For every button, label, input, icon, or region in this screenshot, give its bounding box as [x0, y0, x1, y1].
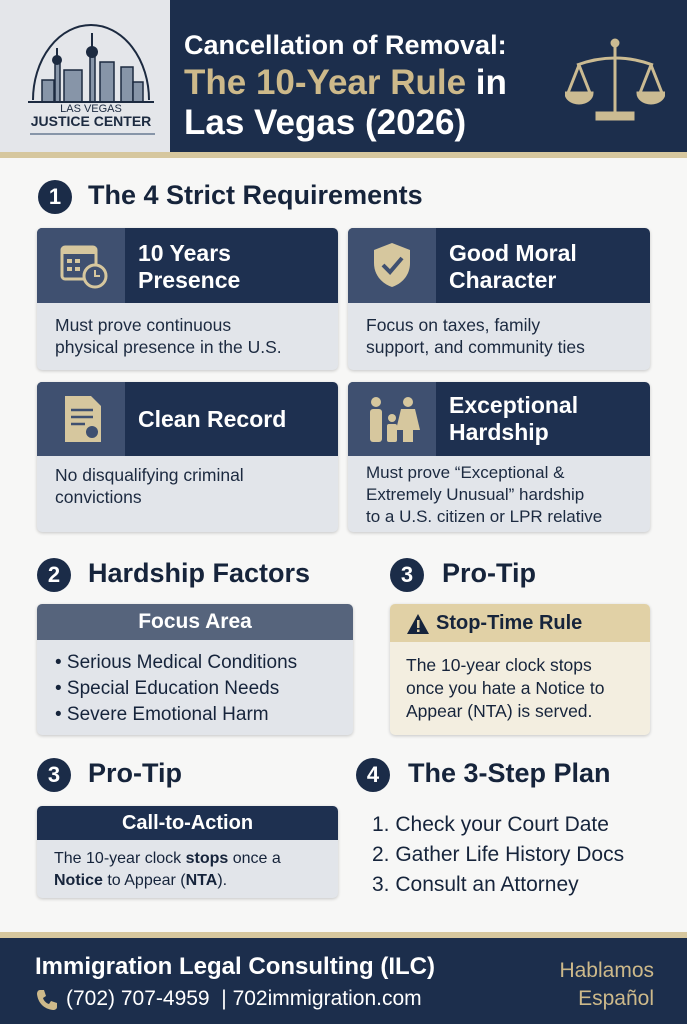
- section 1 heading: 1: [49, 184, 61, 209]
- panel: stop-time rule: Stop-Time Rule: [436, 612, 582, 634]
- panel: call-to-action: The 10-year clock stops once a: [54, 850, 281, 867]
- logo panel: [0, 0, 170, 152]
- bullet list: [55, 652, 297, 725]
- 3-step list: 2. Gather Life History Docs: [372, 843, 624, 866]
- card: clean record: convictions: [55, 487, 142, 507]
- card: good moral character: support, and community ties: [366, 337, 585, 357]
- icon: warning: [407, 614, 429, 634]
- panel: call-to-action: Notice to Appear (NTA).: [54, 872, 227, 889]
- card: 10 years presence: Presence: [138, 267, 240, 293]
- card: clean record: Clean Record: [138, 406, 286, 432]
- footer: Español: [578, 987, 654, 1010]
- card: 10 years presence: Must prove continuous: [55, 315, 231, 335]
- section 4 heading: The 3-Step Plan: [408, 758, 611, 788]
- panel: call-to-action: Call-to-Action: [122, 812, 253, 834]
- section 4 heading: 4: [367, 762, 379, 787]
- panel: focus area: [37, 604, 353, 735]
- card: 10 years presence: physical presence in the U.S.: [55, 337, 282, 357]
- card: 10 years presence: [37, 228, 338, 370]
- card: clean record: No disqualifying criminal: [55, 465, 244, 485]
- section 3 heading: pro-tip again: Pro-Tip: [88, 758, 182, 788]
- section 3 heading: pro-tip: Pro-Tip: [442, 558, 536, 588]
- section 3 heading: pro-tip again: 3: [48, 762, 60, 787]
- panel: stop-time rule: [390, 604, 650, 735]
- 3-step list: 1. Check your Court Date: [372, 813, 609, 836]
- card: exceptional hardship: Extremely Unusual” hardship: [366, 485, 584, 504]
- panel: stop-time rule: Appear (NTA) is served.: [406, 701, 592, 721]
- section 3 heading: pro-tip: [390, 558, 536, 592]
- section 2 heading: 2: [48, 562, 60, 587]
- card: exceptional hardship: to a U.S. citizen or LPR relative: [366, 507, 602, 526]
- panel: call-to-action: [37, 806, 338, 898]
- card: clean record: [37, 382, 338, 532]
- card: good moral character: [348, 228, 650, 370]
- footer: Hablamos: [559, 959, 654, 982]
- logo panel: LAS VEGAS: [60, 103, 122, 115]
- bullet list: • Severe Emotional Harm: [55, 704, 269, 725]
- section 3 heading: pro-tip: 3: [401, 562, 413, 587]
- footer: [0, 932, 687, 1024]
- card: exceptional hardship: Hardship: [449, 419, 549, 445]
- panel: focus area: Focus Area: [138, 610, 252, 633]
- icon: scales: [565, 38, 665, 120]
- 3-step list: [372, 813, 624, 896]
- panel: stop-time rule: once you hate a Notice to: [406, 678, 604, 698]
- section 3 heading: pro-tip again: [37, 758, 182, 792]
- card: exceptional hardship: [348, 382, 650, 532]
- bullet list: • Special Education Needs: [55, 678, 279, 699]
- logo panel: JUSTICE CENTER: [31, 113, 151, 129]
- card: exceptional hardship: Must prove “Exceptional &: [366, 463, 564, 482]
- card: good moral character: Character: [449, 267, 556, 293]
- card: 10 years presence: 10 Years: [138, 240, 231, 266]
- title panel: Las Vegas (2026): [184, 103, 466, 142]
- title panel: The 10-Year Rule in: [184, 63, 507, 102]
- icon: phone: [37, 990, 57, 1010]
- footer: Immigration Legal Consulting (ILC): [35, 953, 435, 980]
- 3-step list: 3. Consult an Attorney: [372, 873, 579, 896]
- section 2 heading: Hardship Factors: [88, 558, 310, 588]
- card: exceptional hardship: Exceptional: [449, 392, 578, 418]
- title panel: Cancellation of Removal:: [184, 30, 507, 60]
- card: good moral character: Good Moral: [449, 240, 577, 266]
- card: good moral character: Focus on taxes, family: [366, 315, 540, 335]
- header: [0, 0, 687, 158]
- title panel: [170, 0, 687, 152]
- footer: (702) 707-4959 | 702immigration.com: [66, 987, 422, 1010]
- bullet list: • Serious Medical Conditions: [55, 652, 297, 673]
- section 1 heading: The 4 Strict Requirements: [88, 180, 423, 210]
- panel: stop-time rule: The 10-year clock stops: [406, 655, 592, 675]
